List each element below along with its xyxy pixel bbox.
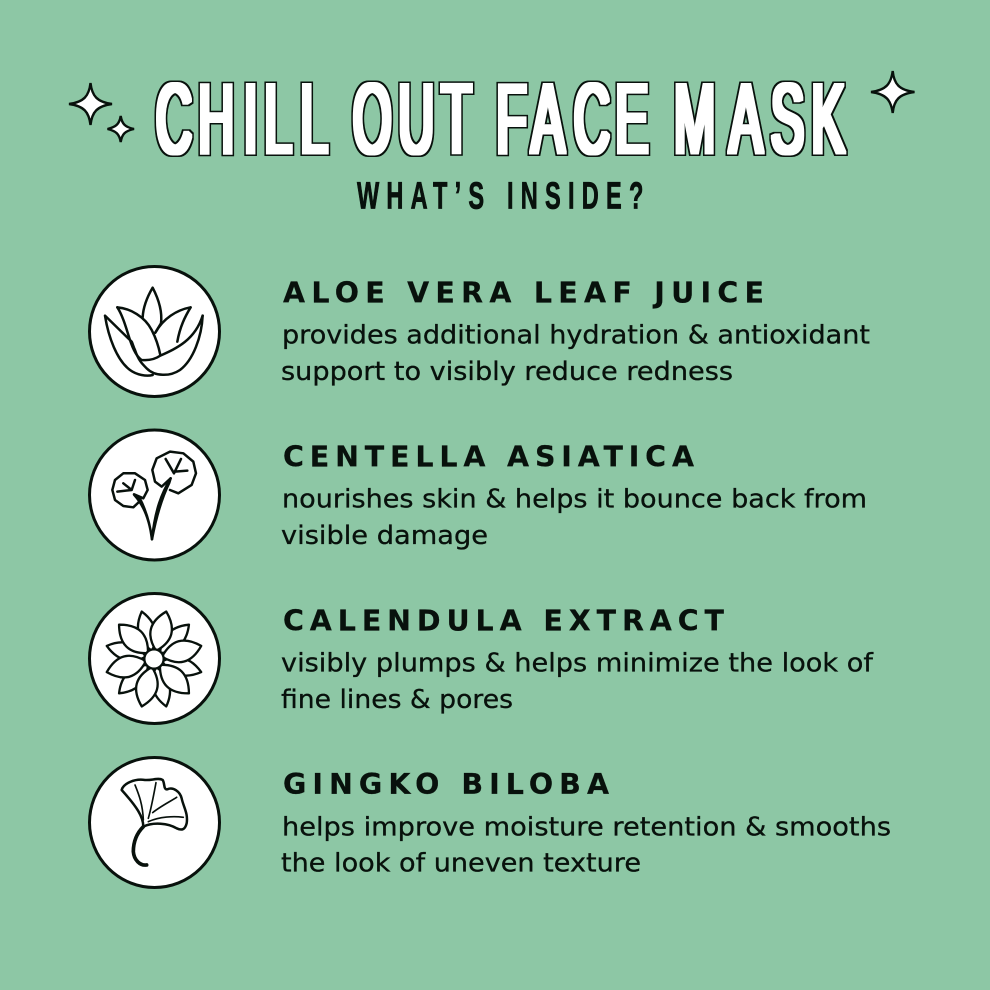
ingredient description xyxy=(281,484,867,551)
ingredient description: nourishes skin & helps it bounce back from xyxy=(282,484,867,514)
row: centella asiatica xyxy=(90,430,867,560)
ingredient name: CALENDULA EXTRACT xyxy=(283,604,725,638)
ingredient description: visibly plumps & helps minimize the look of xyxy=(281,648,874,678)
subtitle: WHAT’S xyxy=(357,174,484,217)
icon: small sparkle left xyxy=(108,116,134,142)
icon: gingko leaf xyxy=(90,758,220,888)
ingredient description: visible damage xyxy=(281,521,488,551)
ingredient description: the look of uneven texture xyxy=(281,848,641,878)
ingredient description: provides additional hydration & antioxidant xyxy=(282,320,870,350)
row: aloe vera xyxy=(90,266,870,396)
subtitle: INSIDE? xyxy=(507,174,643,217)
subtitle xyxy=(357,174,643,217)
icon: sparkle right xyxy=(871,71,914,113)
ingredient description: support to visibly reduce redness xyxy=(281,357,733,387)
title: CHILL OUT FACE MASK xyxy=(156,63,845,175)
ingredient name: ALOE VERA LEAF JUICE xyxy=(283,276,764,310)
ingredient description xyxy=(281,648,874,715)
icon: large sparkle left xyxy=(69,83,112,125)
row: gingko biloba xyxy=(90,758,891,888)
ingredient description: fine lines & pores xyxy=(281,685,513,715)
icon: centella xyxy=(90,430,220,560)
icon: aloe vera xyxy=(90,266,220,396)
ingredient description xyxy=(281,812,891,878)
icon: calendula xyxy=(90,594,220,724)
ingredient description xyxy=(281,320,870,387)
ingredient name: CENTELLA ASIATICA xyxy=(283,440,694,474)
ingredient description: helps improve moisture retention & smooths xyxy=(282,812,891,842)
row: calendula extract xyxy=(90,594,874,724)
ingredient name: GINGKO BILOBA xyxy=(283,768,609,801)
